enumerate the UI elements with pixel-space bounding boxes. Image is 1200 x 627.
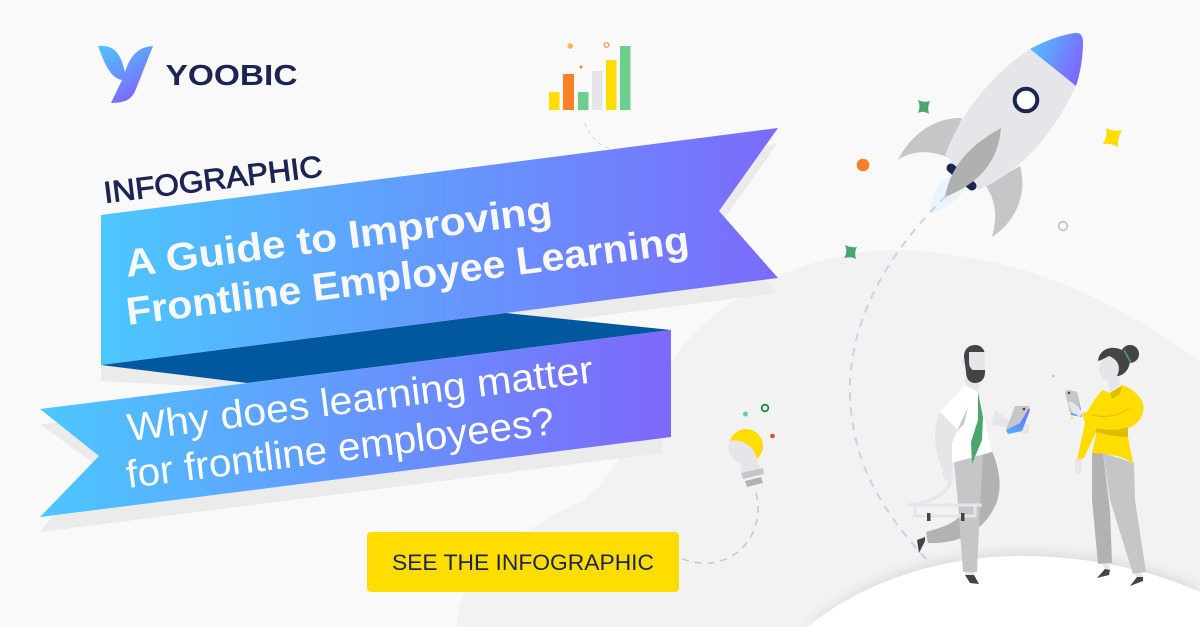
man forearm [992, 410, 1030, 433]
background hill [457, 250, 1200, 627]
rocket right fin [986, 166, 1022, 237]
man back leg [926, 451, 1000, 543]
woman front leg [1103, 453, 1146, 574]
rocket nozzle [951, 168, 972, 186]
man head [964, 345, 985, 383]
woman neck [1107, 376, 1120, 392]
question line 1: Why does learning matter [125, 348, 595, 450]
woman shirt shadow [1095, 427, 1128, 437]
rocket left fin [898, 118, 962, 160]
infographic label: INFOGRAPHIC [102, 150, 324, 210]
woman hair bun [1121, 345, 1139, 363]
button: see the infographic [367, 532, 679, 592]
icon: light bulb [729, 405, 775, 487]
logo wordmark: YOOBIC [166, 60, 298, 92]
rocket window [1015, 89, 1037, 111]
woman back leg [1092, 453, 1112, 564]
woman shirt [1077, 385, 1144, 463]
dashed connector from bulb to button [680, 493, 758, 563]
woman hand [1075, 458, 1083, 475]
man phone [1006, 406, 1030, 434]
title line 1: A Guide to Improving [123, 188, 555, 286]
decorative sparkles [844, 100, 1122, 259]
woman sleeve fold [1092, 408, 1129, 416]
man front leg [954, 452, 983, 572]
woman collar shadow [1110, 386, 1122, 399]
woman shoes [1097, 569, 1143, 586]
rocket nose [1030, 33, 1083, 86]
rocket centre fin [945, 128, 1001, 197]
small dot [1052, 375, 1055, 377]
man tie [971, 392, 983, 464]
question line 2: for frontline employees? [124, 400, 557, 497]
icon: Y mark [98, 46, 153, 103]
man neck [965, 378, 980, 392]
icon: rocket [898, 33, 1083, 237]
dashed flight path [850, 196, 946, 563]
man shoes [917, 537, 979, 584]
man face [969, 352, 985, 370]
man back arm [935, 412, 958, 484]
button label: SEE THE INFOGRAPHIC [392, 550, 654, 575]
illustration: man with phone [908, 345, 1030, 584]
man ear [961, 359, 967, 365]
rocket body [945, 49, 1076, 190]
banner fold [101, 313, 671, 383]
woman phone [1065, 390, 1083, 419]
man sleeve fold [957, 407, 968, 431]
woman ankles [1103, 563, 1143, 578]
dashed connector from chart [585, 123, 611, 149]
banner: question [40, 330, 671, 517]
banner: title [101, 128, 778, 365]
title line 2: Frontline Employee Learning [124, 219, 692, 334]
bar chart icon [549, 43, 630, 110]
woman hair [1098, 348, 1130, 376]
woman head [1099, 357, 1122, 381]
foreground white hill [808, 552, 1200, 627]
woman hair band [1124, 350, 1131, 363]
rocket flame [930, 175, 966, 213]
man torso [940, 385, 992, 463]
logo: YOOBIC [98, 46, 298, 103]
illustration: woman with phone [1052, 345, 1146, 586]
hanger [908, 482, 982, 521]
banner shadows [40, 143, 778, 532]
man ankles [923, 536, 975, 576]
